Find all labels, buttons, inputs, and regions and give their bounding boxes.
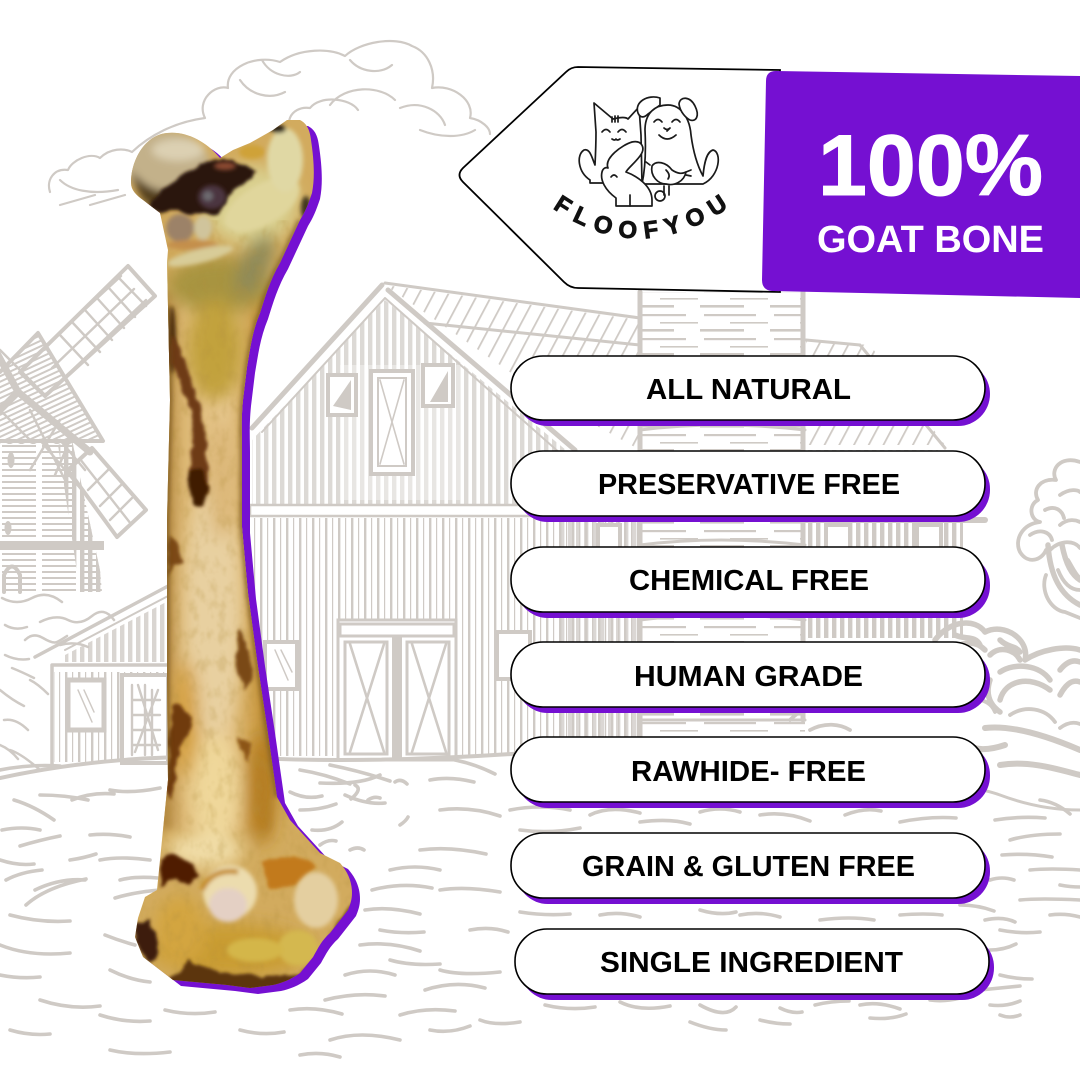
dark cavity [150,161,257,216]
bone edge shading [167,220,300,797]
panel: 100% goat bone [762,71,1080,298]
feature pill: grain and gluten free [511,833,990,904]
windmill tower [0,440,102,592]
lower windows [265,642,297,689]
windmill hill [0,595,114,770]
feature pill: rawhide-free: RAWHIDE- FREE [631,756,866,788]
small barn window [68,680,104,730]
barn gable slats [252,300,590,505]
brown streaks [135,335,360,1000]
head details [165,125,311,374]
goat bone subheading: GOAT BONE [817,219,1044,261]
feature pill: chemical free: CHEMICAL FREE [629,565,869,597]
barn double door [338,620,456,760]
bone body [131,120,352,988]
windmill [0,266,155,770]
trees [790,460,1080,775]
small barn [35,585,170,765]
goat bone illustration [131,120,360,994]
shrubs [790,658,1080,750]
upper right tree [1018,460,1080,618]
feature pill: preservative free: PRESERVATIVE FREE [598,469,900,501]
feature pill: all natural: ALL NATURAL [646,374,851,406]
100% heading: 100% [818,118,1043,214]
right barn wing [805,340,985,638]
gable windows [328,375,356,415]
cat [579,103,642,183]
silo [640,292,805,762]
feature pill: chemical free [511,547,990,618]
feature pill: single ingredient [515,929,994,1000]
feature pill: single ingredient: SINGLE INGREDIENT [600,947,903,979]
lower right tree [935,623,1080,712]
bone purple shadow [139,126,360,994]
feature pill: grain and gluten free: GRAIN & GLUTEN FREE [582,851,915,883]
logo tag [458,66,781,293]
feature pill: all natural [511,356,990,426]
colour zones [150,165,310,976]
gable door [371,371,413,474]
bird [646,162,691,195]
brand name: FLOOFYOU [553,194,726,239]
main barn [250,283,640,760]
barn wall slats [250,518,640,756]
ground strokes [0,752,1080,1057]
feature pill: human grade: HUMAN GRADE [634,661,863,693]
ball head [126,131,210,212]
knobs [202,865,338,966]
windmill sails [0,266,155,537]
windmill cap [0,333,103,444]
tag shape [460,67,780,292]
clouds [49,41,490,205]
small barn door [122,675,168,763]
feature pill: human grade [511,642,990,713]
feature pill: preservative free [511,451,990,522]
dog [637,97,718,184]
barn beam [250,505,640,516]
barn roof [385,285,640,450]
rabbit [602,142,665,206]
feature pill: rawhide-free [511,737,990,808]
mottled texture [158,220,350,884]
icon: pets logo [579,97,718,206]
